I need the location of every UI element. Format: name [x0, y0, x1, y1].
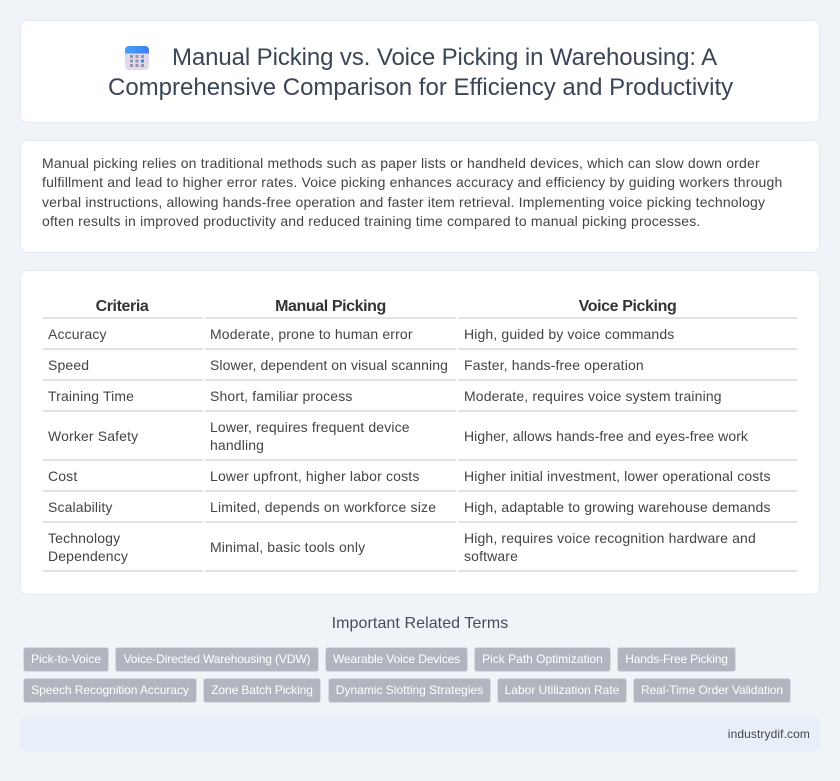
intro text: verbal instructions, allowing hands-free operation and faster item retrieval. Implementing voice picking technology	[42, 194, 765, 210]
related term tags: Pick-to-Voice	[31, 652, 101, 666]
comparison table: Accuracy	[48, 326, 107, 342]
comparison table: Lower upfront, higher labor costs	[210, 468, 420, 484]
comparison table: Manual Picking	[275, 298, 386, 315]
intro text: Manual picking relies on traditional methods such as paper lists or handheld devices, which can slow down order	[42, 155, 760, 171]
related term tags: Voice-Directed Warehousing (VDW)	[124, 652, 310, 666]
intro text: fulfillment and lead to higher error rates. Voice picking enhances accuracy and efficiency by guiding workers through	[42, 174, 782, 190]
comparison table: software	[464, 548, 518, 564]
icon: calendar	[125, 46, 149, 70]
related term tags: Hands-Free Picking	[625, 652, 728, 666]
comparison table	[43, 298, 797, 572]
comparison table: Worker Safety	[48, 428, 138, 444]
comparison table: Moderate, prone to human error	[210, 326, 413, 342]
intro text: often results in improved productivity and reduced training time compared to manual picking processes.	[42, 213, 701, 229]
comparison table: Technology	[48, 530, 120, 546]
comparison table: Higher, allows hands-free and eyes-free work	[464, 428, 748, 444]
related term tags: Real-Time Order Validation	[641, 683, 783, 697]
related term tags: Labor Utilization Rate	[505, 683, 619, 697]
comparison table: Moderate, requires voice system training	[464, 388, 722, 404]
comparison table: Higher initial investment, lower operational costs	[464, 468, 771, 484]
related terms heading: Important Related Terms	[332, 615, 508, 632]
related term tags: Dynamic Slotting Strategies	[336, 683, 483, 697]
comparison table: Criteria	[96, 298, 148, 315]
comparison table: Faster, hands-free operation	[464, 357, 644, 373]
comparison table: Slower, dependent on visual scanning	[210, 357, 448, 373]
related term tags: Pick Path Optimization	[482, 652, 603, 666]
comparison table: Lower, requires frequent device	[210, 419, 410, 435]
comparison table: Minimal, basic tools only	[210, 539, 365, 555]
related term tags	[23, 647, 791, 703]
comparison table: Training Time	[48, 388, 134, 404]
related term tags: Zone Batch Picking	[211, 683, 313, 697]
footer source text: industrydif.com	[728, 727, 810, 741]
related term tags: Wearable Voice Devices	[333, 652, 460, 666]
related term tags: Speech Recognition Accuracy	[31, 683, 189, 697]
comparison table: High, requires voice recognition hardware and	[464, 530, 756, 546]
title: Comprehensive Comparison for Efficiency and Productivity	[108, 74, 733, 101]
title	[108, 44, 733, 101]
comparison table panel	[20, 270, 820, 595]
comparison table: Speed	[48, 357, 89, 373]
comparison table: High, adaptable to growing warehouse demands	[464, 499, 771, 515]
comparison table: handling	[210, 437, 264, 453]
comparison table: Limited, depends on workforce size	[210, 499, 436, 515]
intro text	[42, 155, 782, 229]
header card	[20, 20, 820, 123]
comparison table: Short, familiar process	[210, 388, 352, 404]
comparison table: Voice Picking	[579, 298, 676, 315]
footer bar	[20, 717, 820, 751]
intro card	[20, 140, 820, 253]
comparison table: High, guided by voice commands	[464, 326, 674, 342]
comparison table: Dependency	[48, 548, 128, 564]
title: Manual Picking vs. Voice Picking in Warehousing: A	[172, 44, 717, 71]
comparison table: Scalability	[48, 499, 113, 515]
comparison table: Cost	[48, 468, 77, 484]
